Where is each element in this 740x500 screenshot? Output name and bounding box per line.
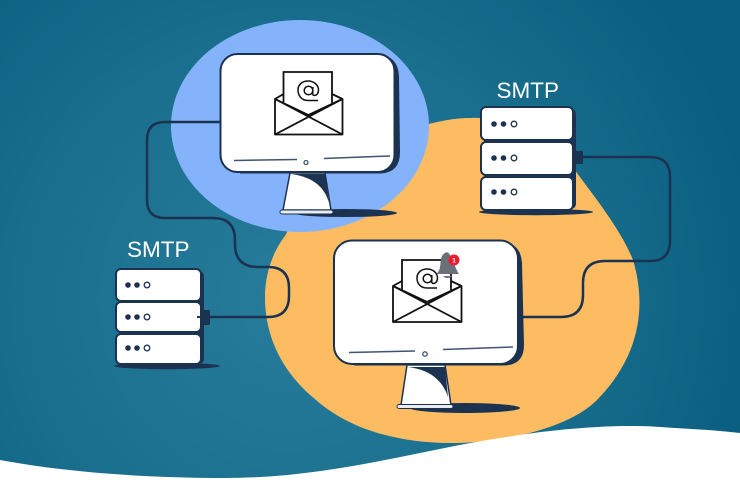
icon: open envelope with at sign (393, 260, 462, 322)
left SMTP server (114, 237, 220, 369)
server rack units (481, 107, 576, 210)
icon: open envelope with at sign (275, 72, 342, 134)
right SMTP server (479, 78, 593, 215)
server rack units (116, 269, 204, 364)
label: SMTP: SMTP (127, 237, 190, 262)
cable: right server to bottom monitor (523, 157, 670, 317)
white wave footer (0, 426, 740, 500)
stand (280, 173, 397, 217)
bottom monitor (334, 240, 524, 413)
base shadow (479, 209, 593, 215)
stand (397, 365, 520, 413)
connector plug (202, 310, 210, 325)
icon: notification bell with badge (436, 252, 460, 278)
connector plug (575, 151, 583, 164)
screen (220, 54, 400, 174)
label: SMTP: SMTP (496, 78, 559, 103)
top monitor (220, 54, 400, 217)
blue circle (171, 20, 429, 232)
screen (334, 240, 524, 366)
base shadow (114, 363, 220, 369)
cable: left server to top monitor (147, 122, 289, 317)
orange blob (265, 118, 639, 443)
icon: notification bell with badge: 1 (452, 257, 456, 264)
